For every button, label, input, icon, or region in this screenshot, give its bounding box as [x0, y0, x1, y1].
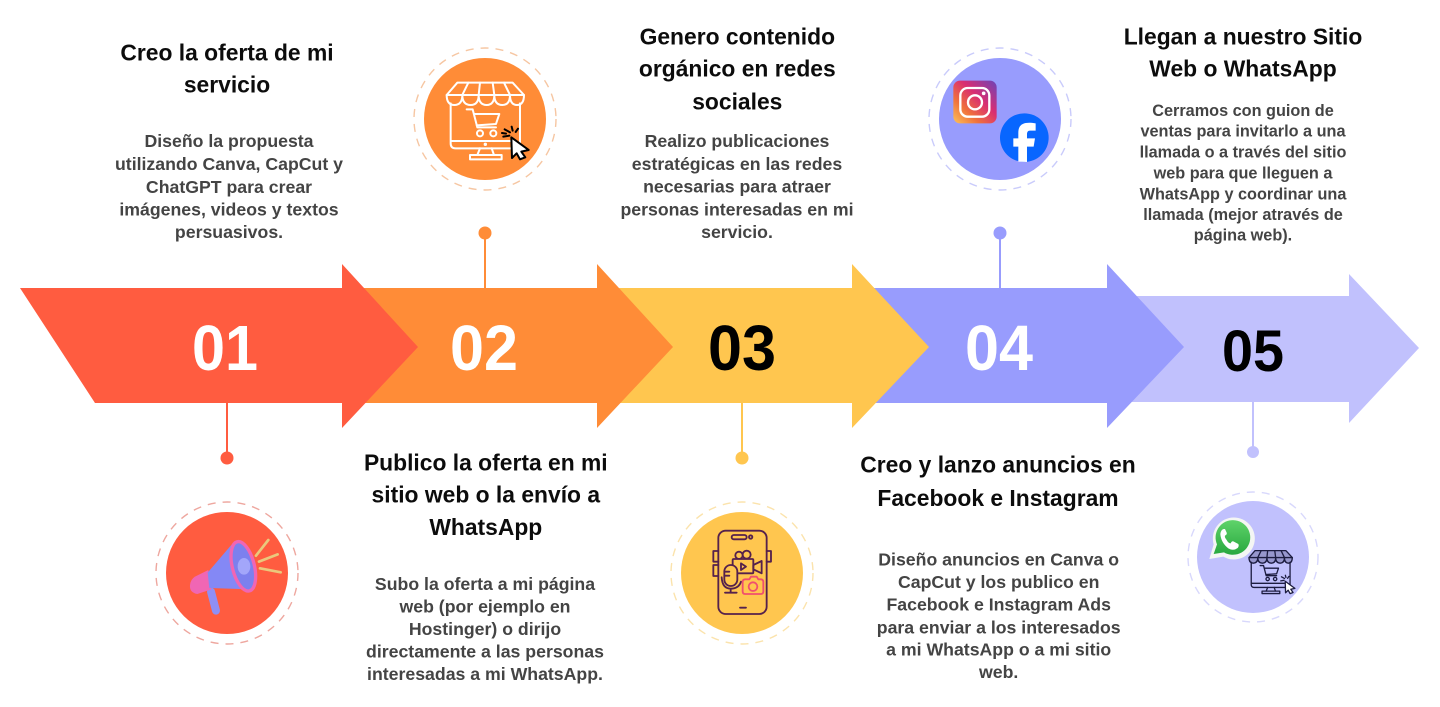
text: step 1: utilizando Canva, CapCut y	[115, 154, 343, 174]
number 04: 04	[965, 312, 1033, 384]
heading: step 2: Publico la oferta en mi	[364, 450, 608, 476]
text: step 4: Diseño anuncios en Canva o	[878, 550, 1119, 570]
number 01: 01	[192, 312, 258, 384]
heading: step 5: Llegan a nuestro Sitio	[1124, 23, 1362, 49]
text: step 5: página web).	[1194, 227, 1292, 245]
heading: step 1: Creo la oferta de mi	[120, 40, 334, 66]
arrow 05	[1100, 274, 1419, 423]
arrow 02	[340, 264, 673, 428]
connector 01	[220, 403, 234, 464]
text: step 4: web.	[978, 662, 1018, 682]
text: step 3: servicio.	[701, 222, 773, 242]
number 03: 03	[708, 312, 776, 384]
text: step 1: Diseño la propuesta	[144, 131, 314, 151]
connector 04	[994, 226, 1006, 288]
text: step 1: persuasivos.	[175, 222, 283, 242]
text: step 4: para enviar a los interesados	[877, 617, 1121, 637]
text: step 5: llamada o a través del sitio	[1140, 144, 1346, 162]
text: step 1: ChatGPT para crear	[146, 177, 312, 197]
text: step 2: interesadas a mi WhatsApp.	[367, 664, 603, 684]
text: step 5: ventas para invitarlo a una	[1140, 123, 1346, 141]
text: step 2: Hostinger) o dirijo	[409, 619, 561, 639]
connector 02	[478, 226, 492, 288]
text: step 1: imágenes, videos y textos	[119, 200, 339, 220]
text: step 5: llamada (mejor através de	[1143, 206, 1343, 224]
arrow 01	[20, 264, 418, 428]
text: step 2: web (por ejemplo en	[398, 596, 571, 616]
text: step 5: web para que lleguen a	[1153, 164, 1333, 182]
arrow 04	[850, 264, 1184, 428]
text: step 4: CapCut y los publico en	[898, 572, 1099, 592]
icon: phone with media	[671, 502, 813, 644]
text: step 3: estratégicas en las redes	[632, 154, 842, 174]
text: step 2: Subo la oferta a mi página	[375, 574, 595, 594]
text: step 4: Facebook e Instagram Ads	[886, 595, 1111, 615]
heading: step 2: sitio web o la envío a	[372, 482, 600, 508]
icon: megaphone	[156, 502, 298, 644]
heading: step 4: Facebook e Instagram	[877, 485, 1119, 511]
arrow 03	[600, 264, 929, 428]
text: step 3: necesarias para atraer	[643, 177, 831, 197]
heading: step 1: servicio	[184, 72, 270, 98]
text: step 5: WhatsApp y coordinar una	[1140, 185, 1347, 203]
icon: online store	[414, 48, 556, 190]
text: step 3: Realizo publicaciones	[645, 131, 830, 151]
heading: step 2: WhatsApp	[429, 514, 542, 540]
text: step 2: directamente a las personas	[366, 642, 604, 662]
icon: instagram and facebook	[929, 48, 1071, 190]
heading: step 3: Genero contenido	[640, 23, 835, 49]
heading: step 3: sociales	[692, 88, 782, 114]
text: step 5: Cerramos con guion de	[1152, 102, 1334, 120]
heading: step 5: Web o WhatsApp	[1149, 56, 1337, 82]
connector 05	[1247, 402, 1259, 458]
connector 03	[736, 403, 748, 464]
text: step 4: a mi WhatsApp o a mi sitio	[886, 640, 1111, 660]
heading: step 4: Creo y lanzo anuncios en	[860, 452, 1136, 478]
text: step 3: personas interesadas en mi	[620, 200, 854, 220]
number 02: 02	[450, 312, 518, 384]
heading: step 3: orgánico en redes	[639, 56, 836, 82]
icon: whatsapp and store	[1188, 492, 1318, 622]
number 05: 05	[1222, 319, 1284, 384]
